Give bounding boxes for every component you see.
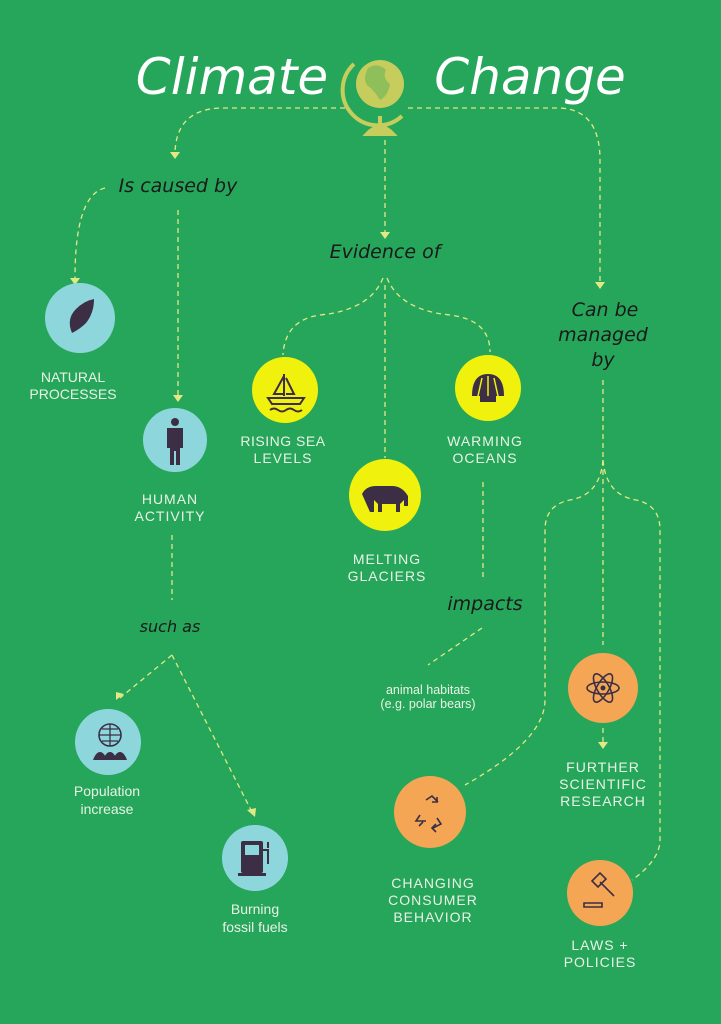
node: melting glaciers: MELTING <box>353 551 421 567</box>
node: population increase: Population <box>74 783 140 799</box>
node: natural processes <box>29 283 117 402</box>
heading: can be managed by: by <box>591 349 615 371</box>
node: population increase: increase <box>81 801 134 817</box>
node: human activity <box>134 408 207 524</box>
node: laws + policies: LAWS + <box>571 937 629 953</box>
icon: globe <box>343 60 404 134</box>
title <box>136 48 626 106</box>
node: natural processes: PROCESSES <box>29 386 117 402</box>
heading: impacts: impacts <box>447 593 523 615</box>
node: changing consumer behavior: CHANGING <box>391 875 475 891</box>
heading: can be managed by <box>558 299 649 371</box>
text: animal habitats: (e.g. polar bears) <box>380 697 476 711</box>
node: rising sea levels: LEVELS <box>254 450 312 466</box>
node: burning fossil fuels: fossil fuels <box>222 919 288 935</box>
node: rising sea levels: RISING SEA <box>240 433 326 449</box>
node: population increase <box>74 709 141 817</box>
node: warming oceans <box>447 355 523 466</box>
text: animal habitats <box>380 683 476 711</box>
node: burning fossil fuels: Burning <box>231 901 279 917</box>
heading: evidence of: Evidence of <box>330 241 444 263</box>
connector lines <box>70 108 660 880</box>
node: melting glaciers: GLACIERS <box>348 568 426 584</box>
node: changing consumer behavior: BEHAVIOR <box>393 909 473 925</box>
node: further scientific research <box>559 653 647 809</box>
node: warming oceans: OCEANS <box>452 450 518 466</box>
text: animal habitats: animal habitats <box>386 683 470 697</box>
title: Change <box>434 48 626 106</box>
node: melting glaciers <box>348 459 426 584</box>
node: further scientific research: RESEARCH <box>560 793 646 809</box>
heading: can be managed by: managed <box>558 324 649 346</box>
node: rising sea levels <box>240 357 326 466</box>
node: burning fossil fuels <box>222 825 288 935</box>
node: human activity: ACTIVITY <box>134 508 206 524</box>
title: Climate <box>136 48 328 106</box>
node: human activity: HUMAN <box>142 491 198 507</box>
node: natural processes: NATURAL <box>41 369 105 385</box>
heading: can be managed by: Can be <box>572 299 638 321</box>
heading: is caused by: Is caused by <box>119 175 238 197</box>
heading: such as: such as <box>140 617 200 636</box>
node: warming oceans: WARMING <box>447 433 523 449</box>
node: further scientific research: FURTHER <box>566 759 640 775</box>
node: laws + policies <box>564 860 636 970</box>
node: changing consumer behavior: CONSUMER <box>388 892 478 908</box>
node: changing consumer behavior <box>388 776 478 925</box>
node: further scientific research: SCIENTIFIC <box>559 776 647 792</box>
node: laws + policies: POLICIES <box>564 954 636 970</box>
